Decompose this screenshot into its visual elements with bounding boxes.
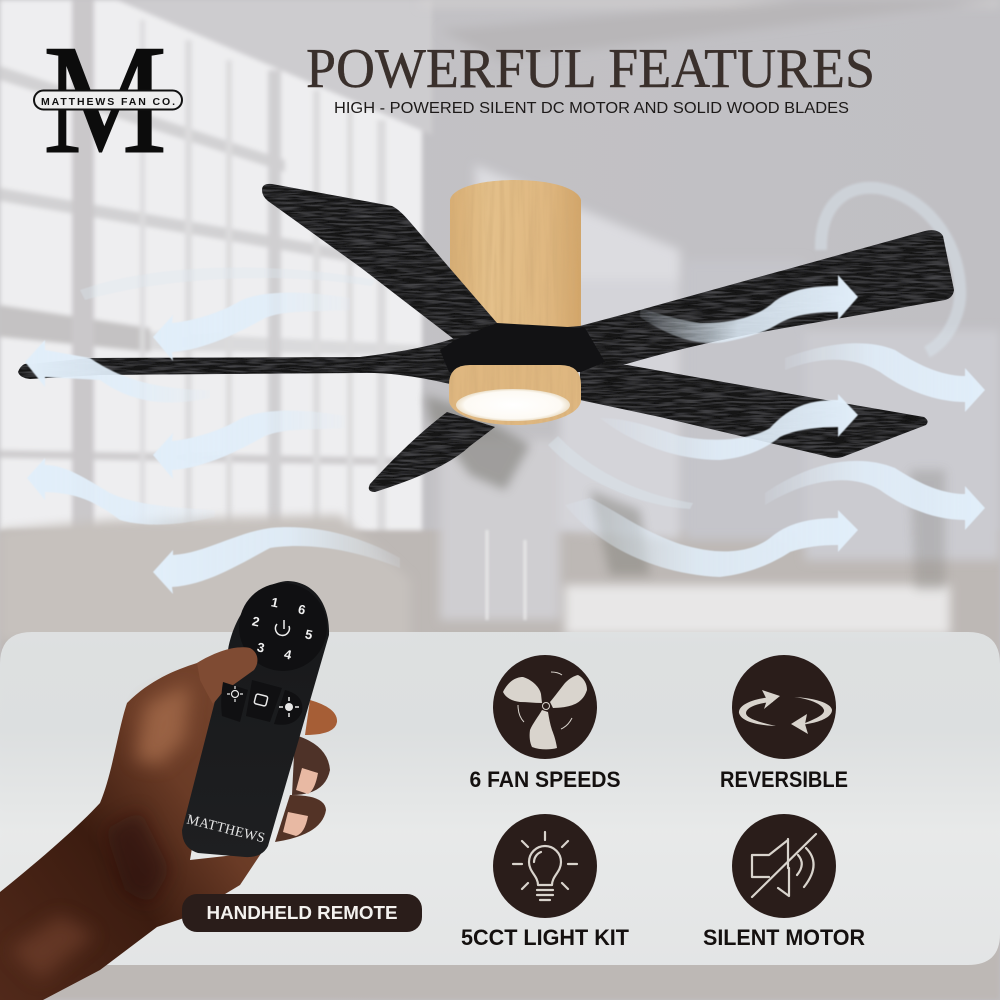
- arrow: far right lower: [765, 461, 985, 530]
- remote in hand: 4: [283, 646, 294, 663]
- logo: Matthews Fan Co.: MATTHEWS FAN CO.: [41, 96, 175, 108]
- feature: silent motor: [703, 814, 865, 950]
- label: REVERSIBLE: [720, 767, 848, 792]
- feature: reversible: [720, 655, 848, 792]
- back fingers: [275, 700, 337, 842]
- ceiling fan: [18, 180, 954, 492]
- icon: reverse arrows: [732, 655, 836, 759]
- feature: 6 fan speeds: [470, 655, 620, 792]
- feature: 5CCT light kit: [461, 814, 630, 950]
- remote brand text: MATTHEWS: [185, 813, 266, 846]
- power icon: [275, 620, 289, 635]
- remote in hand: 1: [270, 594, 280, 611]
- remote in hand: [0, 581, 337, 1000]
- title: POWERFUL FEATURES: [306, 38, 875, 100]
- fan blades: [18, 184, 954, 492]
- hub: [440, 323, 605, 372]
- arrow: mid left: [153, 411, 345, 479]
- arrow: blade tip left: [25, 340, 210, 402]
- arrow: bottom right: [565, 498, 858, 577]
- label: SILENT MOTOR: [703, 925, 865, 950]
- arrow: upper right: [640, 275, 858, 343]
- label: 6 FAN SPEEDS: [470, 767, 620, 792]
- remote in hand: 3: [256, 639, 266, 656]
- motor housing: [450, 180, 581, 332]
- shadow at wrist: [105, 810, 170, 905]
- remote button row: [221, 680, 302, 725]
- remote body: [182, 581, 329, 857]
- number dial: [239, 583, 327, 671]
- arm and palm: [0, 647, 262, 1000]
- label: handheld remote: HANDHELD REMOTE: [206, 902, 398, 923]
- icon: muted speaker: [732, 814, 836, 918]
- panel: features: [0, 632, 1000, 965]
- arrow: lower far left: [27, 458, 215, 525]
- LED light: [456, 389, 570, 421]
- highlight on back of hand: [135, 685, 190, 765]
- remote in hand: 5: [304, 626, 314, 643]
- label: 5CCT LIGHT KIT: [461, 925, 630, 950]
- highlight on forearm: [10, 915, 95, 980]
- logo: Matthews Fan Co.: M: [43, 12, 167, 186]
- arrow: far right upper: [785, 343, 985, 412]
- icon: fan: [493, 655, 597, 759]
- swirl air trail: [821, 188, 960, 352]
- arrow: upper left: [153, 293, 350, 361]
- label: handheld remote: [182, 894, 422, 932]
- arrow: bottom left: [153, 527, 400, 594]
- thumb: [197, 647, 257, 704]
- remote in hand: 2: [251, 613, 261, 630]
- airflow arrows: [25, 268, 985, 594]
- remote in hand: 6: [297, 601, 307, 618]
- icon: light bulb: [493, 814, 597, 918]
- subtitle: HIGH - POWERED SILENT DC MOTOR AND SOLID WOOD BLADES: [334, 100, 849, 117]
- arrow: mid right: [600, 394, 858, 460]
- light ring: [449, 365, 581, 425]
